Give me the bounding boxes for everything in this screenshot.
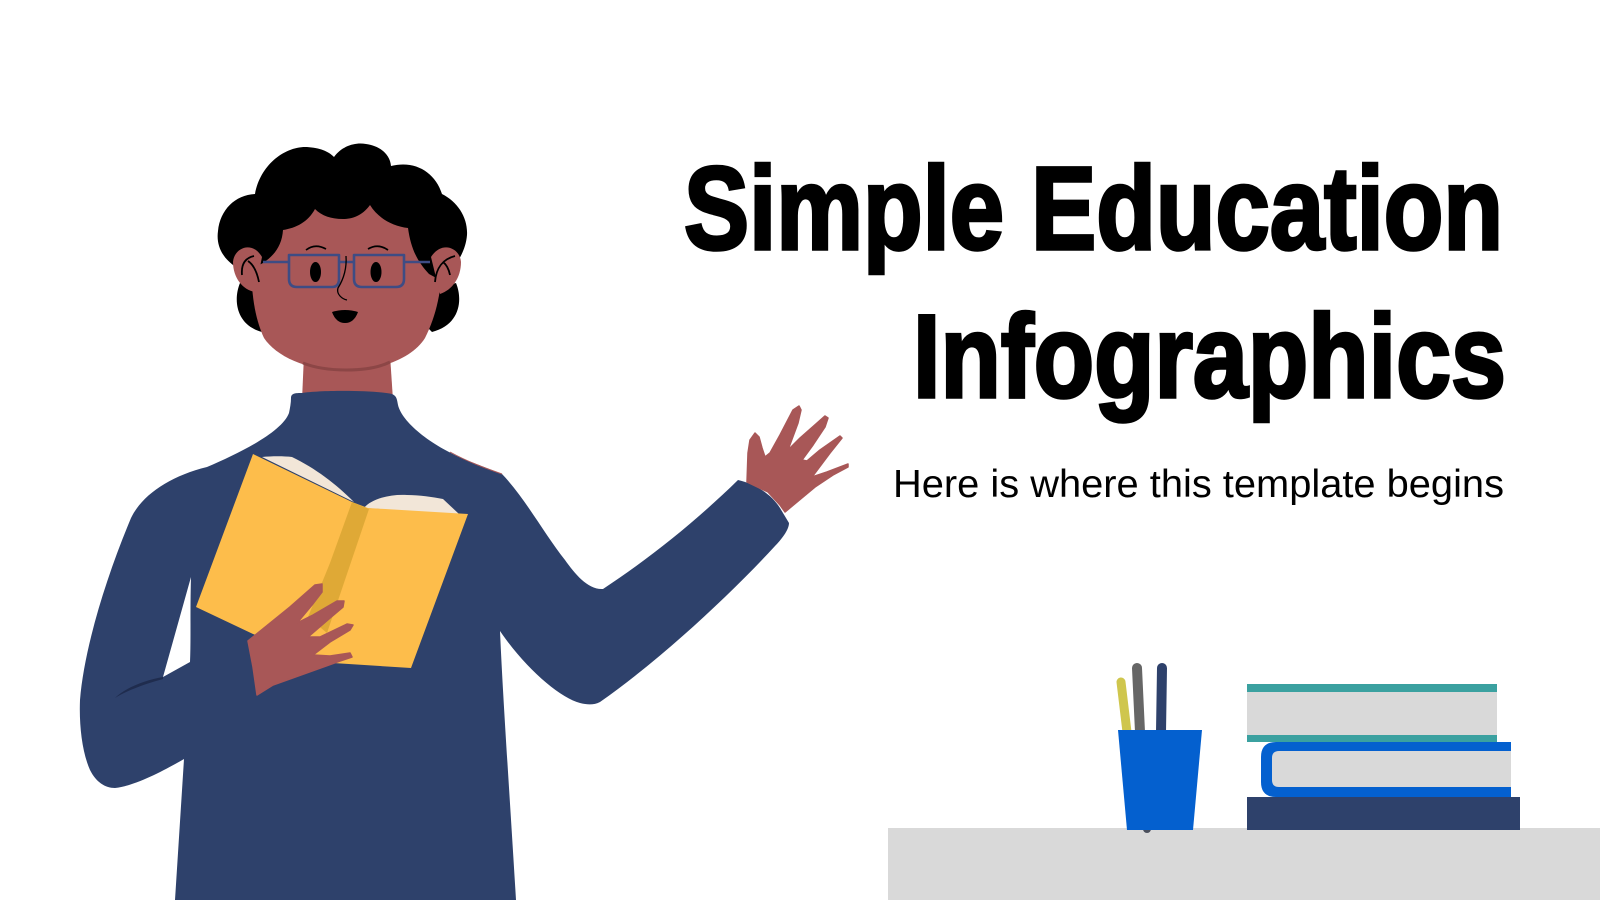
raised hand <box>747 406 848 512</box>
mouth <box>332 310 358 323</box>
pencil cup <box>1118 668 1202 833</box>
neck shadow <box>303 362 390 370</box>
hair <box>218 144 467 280</box>
back hair <box>237 283 459 332</box>
book cover <box>196 454 468 668</box>
bottom book <box>1247 797 1520 830</box>
glasses <box>263 255 430 287</box>
pencils <box>1121 668 1162 732</box>
shoulder edge <box>450 452 502 474</box>
ear details <box>242 256 455 282</box>
eyes <box>310 262 382 282</box>
title <box>684 143 1506 423</box>
body <box>80 391 789 900</box>
cup <box>1118 730 1202 830</box>
nose <box>338 256 347 300</box>
pencil tip under cup <box>1143 825 1151 833</box>
desk <box>888 828 1600 900</box>
sleeve gap <box>163 577 191 677</box>
top book <box>1247 684 1497 742</box>
arm crease <box>115 677 163 698</box>
subtitle: Here is where this template begins <box>893 463 1504 506</box>
face <box>251 202 443 371</box>
stack of books <box>1247 684 1520 830</box>
neck <box>302 355 393 400</box>
title: Infographics <box>913 291 1506 423</box>
eyebrows <box>306 246 388 250</box>
hand holding book <box>248 584 353 695</box>
illustration: teacher <box>80 144 848 900</box>
open book <box>196 454 468 668</box>
middle book <box>1261 742 1511 797</box>
book spine <box>308 502 369 633</box>
ears <box>233 247 461 294</box>
book pages <box>262 456 459 514</box>
